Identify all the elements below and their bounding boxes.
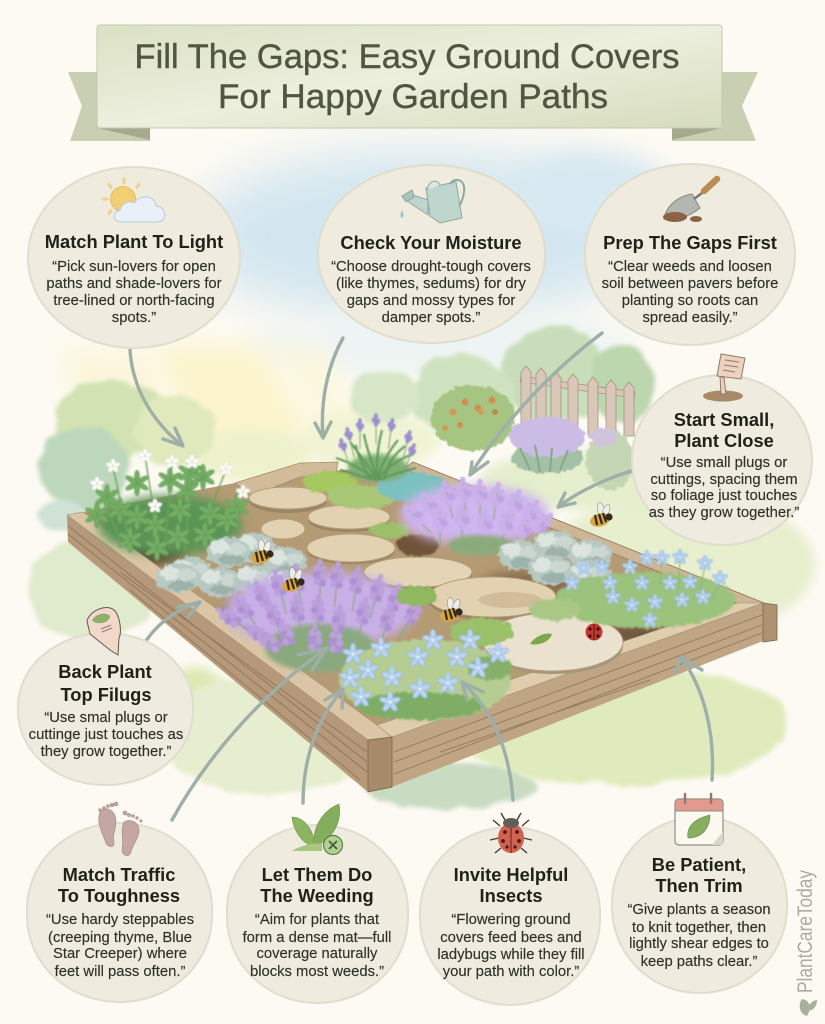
picket fence <box>520 366 635 436</box>
insect: ladybug on stone <box>530 624 602 644</box>
body text: gaps and mossy types for <box>347 293 515 309</box>
arrow: light <box>130 350 183 446</box>
panel: match traffic to toughness: To Toughness <box>58 885 180 906</box>
body text: “Give plants a season <box>627 902 771 918</box>
arrow: insects <box>462 682 513 800</box>
arrow: prep <box>470 333 602 475</box>
stepping stones <box>249 487 623 674</box>
body text: keep paths clear.” <box>641 954 757 970</box>
bed soil <box>83 465 740 725</box>
icon: calendar <box>675 794 723 845</box>
panel: be patient, then trim: Then Trim <box>655 875 743 896</box>
body text: “Aim for plants that <box>255 912 379 928</box>
body text: (like thymes, sedums) for dry <box>336 276 527 292</box>
background: sky and sun wash <box>60 150 670 470</box>
icon: watering can <box>400 180 464 223</box>
panel: match plant to light <box>28 167 240 348</box>
body text: “Use hardy steppables <box>46 912 194 928</box>
plant: silver right <box>498 530 612 590</box>
title ribbon <box>68 25 758 141</box>
body text: ladybugs while they fill <box>437 947 585 963</box>
panel: back plant top filugs: Top Filugs <box>60 684 152 705</box>
body text: soil between pavers before <box>602 276 778 292</box>
heading: Be Patient, <box>652 854 746 875</box>
body text: form a dense mat—full <box>243 930 391 946</box>
background bushes and trees <box>351 327 654 451</box>
body text: “Flowering ground <box>451 912 571 928</box>
arrow: patient <box>675 657 713 780</box>
icon: ladybug <box>490 813 532 853</box>
heading: Check Your Moisture <box>340 232 522 253</box>
panel: start small, plant close <box>632 375 812 545</box>
arrow: back plant <box>142 602 200 647</box>
plant: blue star front <box>339 629 512 721</box>
heading: Prep The Gaps First <box>603 232 777 253</box>
body text: covers feed bees and <box>440 930 582 946</box>
plant: blue star right <box>529 549 735 628</box>
panel: invite helpful insects <box>420 827 600 1005</box>
heading: Match Plant To Light <box>45 231 223 252</box>
panel: start small, plant close: Plant Close <box>674 430 774 451</box>
body text: (creeping thyme, Blue <box>48 930 192 946</box>
icon: leaf with cross <box>292 804 342 854</box>
body text: lightly shear edges to <box>629 936 769 952</box>
panel: let them do the weeding <box>227 825 408 1003</box>
body text: cuttinge just touches as <box>29 727 183 743</box>
plant: moss and grass tuft <box>302 413 447 556</box>
icon: plant marker <box>703 354 745 402</box>
title text: Fill The Gaps: Easy Ground Covers <box>134 38 680 76</box>
body text: planting so roots can <box>622 293 758 309</box>
body text: spots.” <box>112 310 156 326</box>
panel: invite helpful insects: Insects <box>479 885 543 906</box>
logo: PlantCareToday vertical: PlantCareToday <box>794 870 817 993</box>
body text: “Use small plugs or <box>661 455 787 471</box>
plant: lavender back <box>398 476 558 555</box>
body text: damper spots.” <box>382 310 480 326</box>
body text: tree-lined or north-facing <box>53 293 215 309</box>
body text: “Clear weeds and loosen <box>608 259 772 275</box>
rail: back <box>235 462 764 605</box>
icon: footprints <box>99 802 142 856</box>
panel: check your moisture <box>318 165 545 343</box>
title ribbon: For Happy Garden Paths <box>218 78 608 116</box>
plant: moss by stones <box>397 586 514 646</box>
icon: seed packet <box>87 608 120 655</box>
background: grass washes <box>28 410 815 809</box>
body text: “Pick sun-lovers for open <box>52 259 216 275</box>
background lavender bushes <box>509 417 634 490</box>
insects: bees <box>250 502 613 624</box>
heading: Match Traffic <box>63 864 175 885</box>
body text: Star Creeper) where <box>53 946 187 962</box>
arrow: start small <box>558 469 638 507</box>
body text: blocks most weeds.” <box>250 964 384 980</box>
arrow: weeding <box>303 689 343 803</box>
body text: to knit together, then <box>632 920 766 936</box>
heading: Invite Helpful <box>454 864 568 885</box>
background bush: left <box>38 380 215 529</box>
arrow: moisture <box>315 338 343 438</box>
heading: Back Plant <box>58 661 152 682</box>
panel: let them do the weeding: The Weeding <box>260 885 374 906</box>
arrow: traffic <box>172 648 327 820</box>
body text: paths and shade-lovers for <box>46 276 222 292</box>
body text: feet will pass often.” <box>55 964 185 980</box>
body text: “Choose drought-tough covers <box>331 259 531 275</box>
raised garden bed <box>67 413 777 792</box>
icon: trowel <box>663 179 717 222</box>
body text: spread easily.” <box>642 310 738 326</box>
rail: front right <box>368 603 777 792</box>
body text: coverage naturally <box>257 946 378 962</box>
body text: “Use smal plugs or <box>44 710 168 726</box>
body text: cuttings, spacing them <box>650 472 798 488</box>
body text: your path with color.” <box>443 964 579 980</box>
plant: white flowered green <box>84 449 251 561</box>
icon: sun and cloud <box>101 177 165 222</box>
heading: Start Small, <box>674 409 774 430</box>
body text: as they grow together.” <box>649 505 799 521</box>
rail: left <box>67 512 392 792</box>
panel: be patient, then trim <box>612 817 787 993</box>
plant: silver left <box>156 533 307 600</box>
body text: they grow together.” <box>41 744 171 760</box>
plant: lavender front <box>213 559 428 672</box>
panel: match traffic to toughness <box>27 823 212 1002</box>
panel: prep the gaps first <box>585 164 795 345</box>
heading: Let Them Do <box>262 864 372 885</box>
panel: back plant top filugs <box>18 633 193 785</box>
body text: so foliage just touches <box>651 488 797 504</box>
